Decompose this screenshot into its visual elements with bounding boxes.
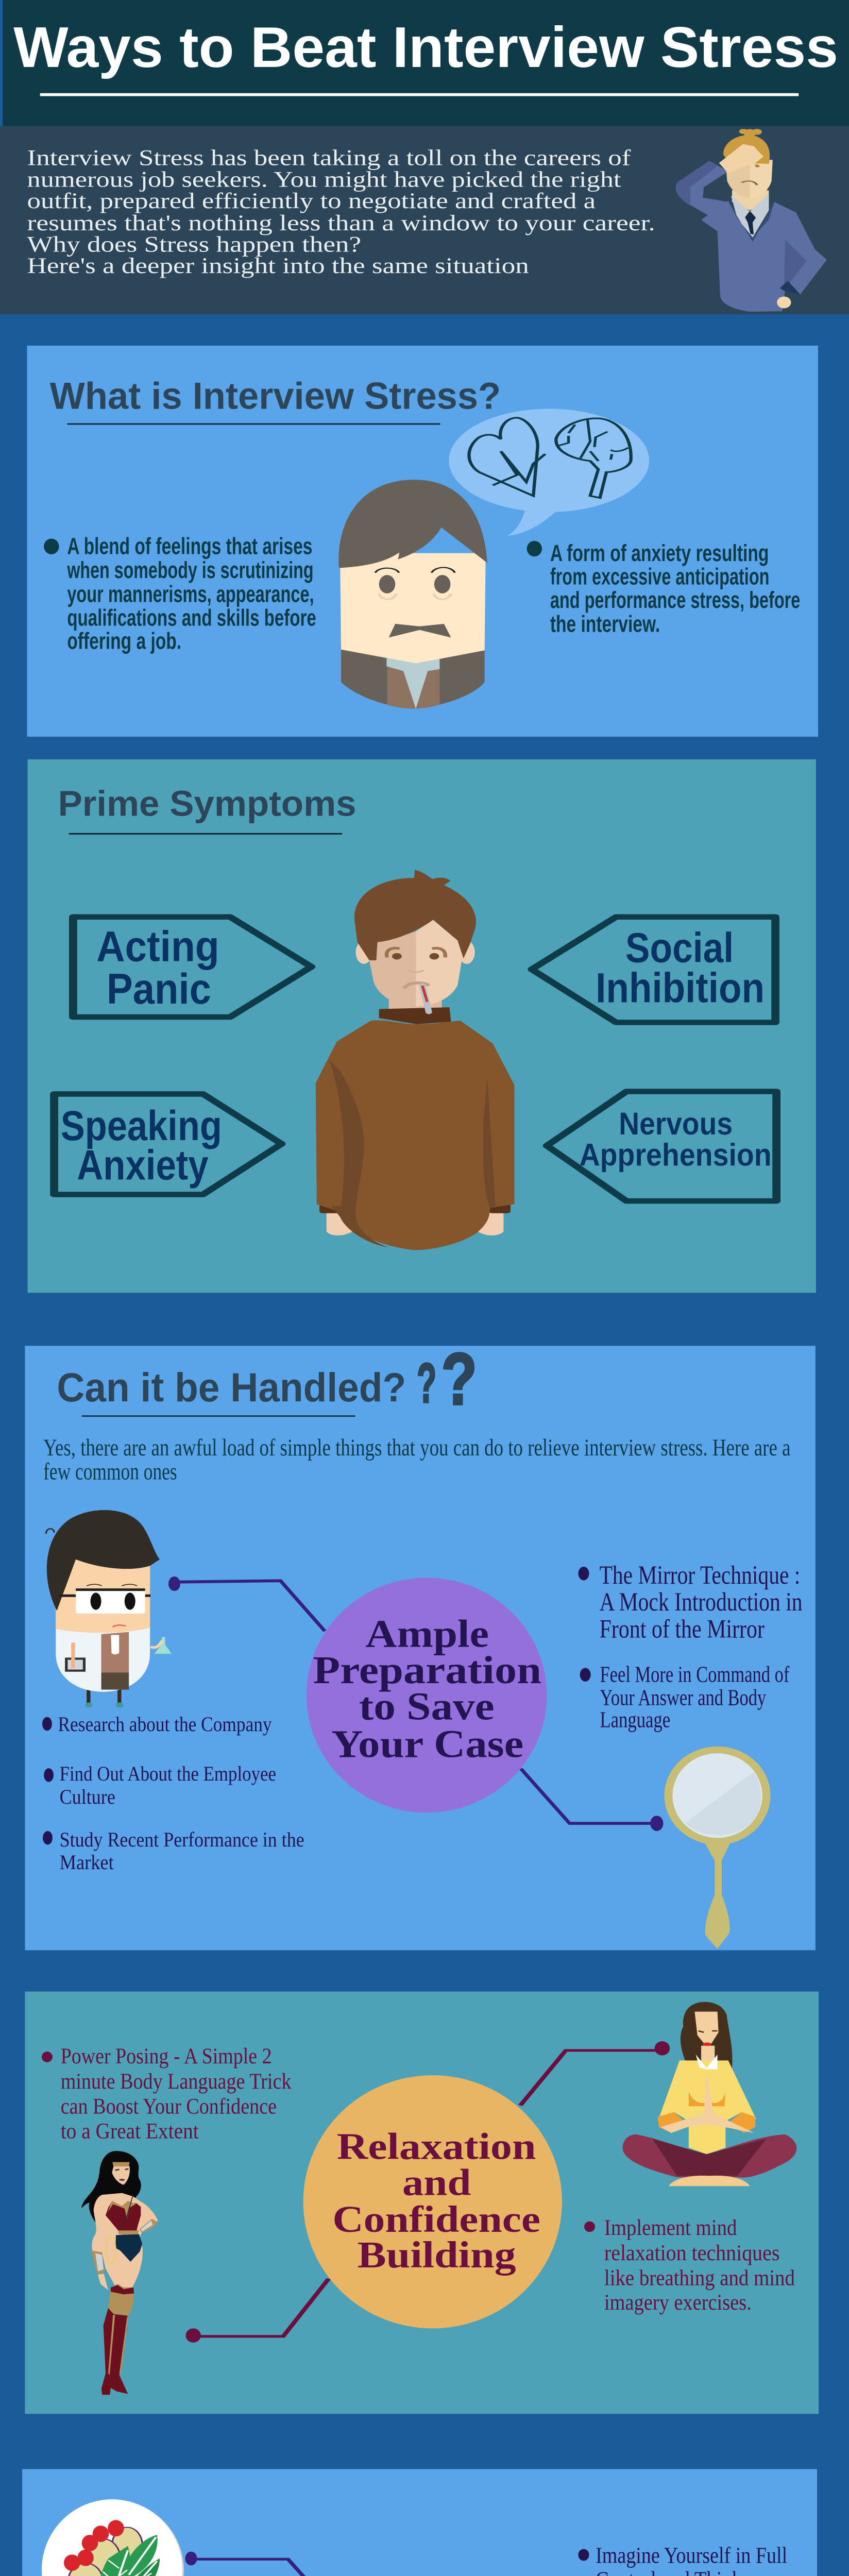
bullets: left: Find Out About the Employee bbox=[60, 1762, 276, 1786]
panel: what is interview stress: your mannerisms, appearance, bbox=[67, 581, 314, 607]
connector: top bbox=[168, 1577, 325, 1631]
panel: relaxation and confidence bbox=[25, 1992, 819, 2414]
bullets: left bbox=[42, 1713, 304, 1874]
bullet text: power posing bbox=[42, 2043, 292, 2143]
panel: prime symptoms bbox=[28, 759, 816, 1293]
bullet text: power posing: can Boost Your Confidence bbox=[61, 2094, 277, 2119]
icon: scientist bbox=[46, 1510, 172, 1707]
arrow: speaking anxiety: Speaking bbox=[61, 1102, 222, 1149]
arrow: acting panic: Panic bbox=[107, 965, 211, 1013]
circle: ample preparation: to Save bbox=[359, 1684, 495, 1728]
bullet text: imagine and smile bbox=[578, 2543, 790, 2576]
arrow: social inhibition bbox=[532, 917, 775, 1023]
panel: what is interview stress: A blend of feelings that arises bbox=[67, 533, 312, 559]
bullet text: mind relaxation bbox=[584, 2215, 795, 2315]
connector: top bbox=[520, 2041, 670, 2106]
heading: ? bbox=[417, 1352, 436, 1414]
circle: ample preparation: Preparation bbox=[313, 1648, 541, 1692]
circle: ample preparation bbox=[307, 1578, 547, 1812]
text block: form of anxiety: the interview. bbox=[550, 611, 660, 637]
connector: bottom bbox=[185, 2279, 329, 2343]
text block: blend of feelings bbox=[44, 533, 316, 654]
arrow: nervous apprehension bbox=[547, 1092, 776, 1201]
intro text bbox=[27, 145, 655, 278]
bullets: left: Research about the Company bbox=[58, 1713, 272, 1736]
intro paragraph bbox=[43, 1435, 790, 1485]
circle: relaxation: Building bbox=[358, 2234, 516, 2276]
heading bbox=[57, 1338, 477, 1420]
panel: what is interview stress: qualifications and skills before bbox=[67, 604, 316, 631]
bullet text: power posing: Power Posing - A Simple 2 bbox=[61, 2043, 272, 2069]
intro paragraph: few common ones bbox=[43, 1459, 177, 1485]
circle: relaxation: and bbox=[402, 2162, 471, 2204]
icon: sick man with thermometer bbox=[316, 870, 514, 1250]
icon: wonder woman bbox=[81, 2151, 158, 2395]
bullets: left: Culture bbox=[60, 1786, 115, 1809]
arrow: speaking anxiety: Anxiety bbox=[77, 1142, 209, 1189]
bullets: right: Language bbox=[600, 1707, 670, 1732]
bullets: left: Market bbox=[60, 1851, 114, 1874]
arrow: social inhibition: Social bbox=[625, 924, 734, 971]
text block: form of anxiety bbox=[527, 539, 800, 637]
circle: relaxation: Confidence bbox=[332, 2199, 540, 2241]
icon: speech bubble with heart and brain bbox=[449, 409, 649, 536]
arrow: speaking anxiety bbox=[54, 1094, 282, 1194]
icon: plate of healthy food bbox=[42, 2499, 184, 2576]
arrow: nervous apprehension: Nervous bbox=[619, 1107, 733, 1141]
panel: can it be handled bbox=[25, 1338, 816, 1950]
bullets: right bbox=[578, 1561, 803, 1732]
connector: top bbox=[185, 2552, 337, 2576]
arrow: acting panic bbox=[73, 917, 311, 1017]
icon: hand mirror bbox=[665, 1747, 771, 1949]
panel: introduction bbox=[0, 126, 849, 314]
bullet text: power posing: to a Great Extent bbox=[61, 2119, 199, 2143]
arrow: acting panic: Acting bbox=[96, 922, 219, 970]
icon: man with moustache bbox=[338, 480, 487, 709]
circle: relaxation bbox=[303, 2075, 562, 2328]
circle: ample preparation: Your Case bbox=[331, 1722, 523, 1766]
panel: header bbox=[3, 0, 849, 126]
panel: what is interview stress bbox=[27, 346, 818, 737]
panel: fuel yourself bbox=[22, 2469, 817, 2576]
icon: stressed man in suit bbox=[675, 129, 827, 312]
heading: Prime Symptoms bbox=[58, 783, 356, 823]
heading: Can it be Handled? bbox=[57, 1365, 406, 1410]
text block: blend of feelings: offering a job. bbox=[67, 628, 181, 654]
connector: bottom bbox=[521, 1769, 663, 1831]
panel: relaxation and confidence: minute Body Language Trick bbox=[61, 2069, 292, 2093]
bullets: left: Study Recent Performance in the bbox=[60, 1828, 304, 1852]
circle: relaxation: Relaxation bbox=[337, 2126, 536, 2167]
icon: meditating woman bbox=[623, 2002, 796, 2186]
bullets: right: Front of the Mirror bbox=[599, 1615, 765, 1643]
circle: ample preparation: Ample bbox=[365, 1612, 489, 1655]
panel: what is interview stress: when somebody is scrutinizing bbox=[67, 556, 314, 583]
intro text: Why does Stress happen then? bbox=[27, 232, 361, 257]
heading: ? bbox=[442, 1338, 477, 1420]
